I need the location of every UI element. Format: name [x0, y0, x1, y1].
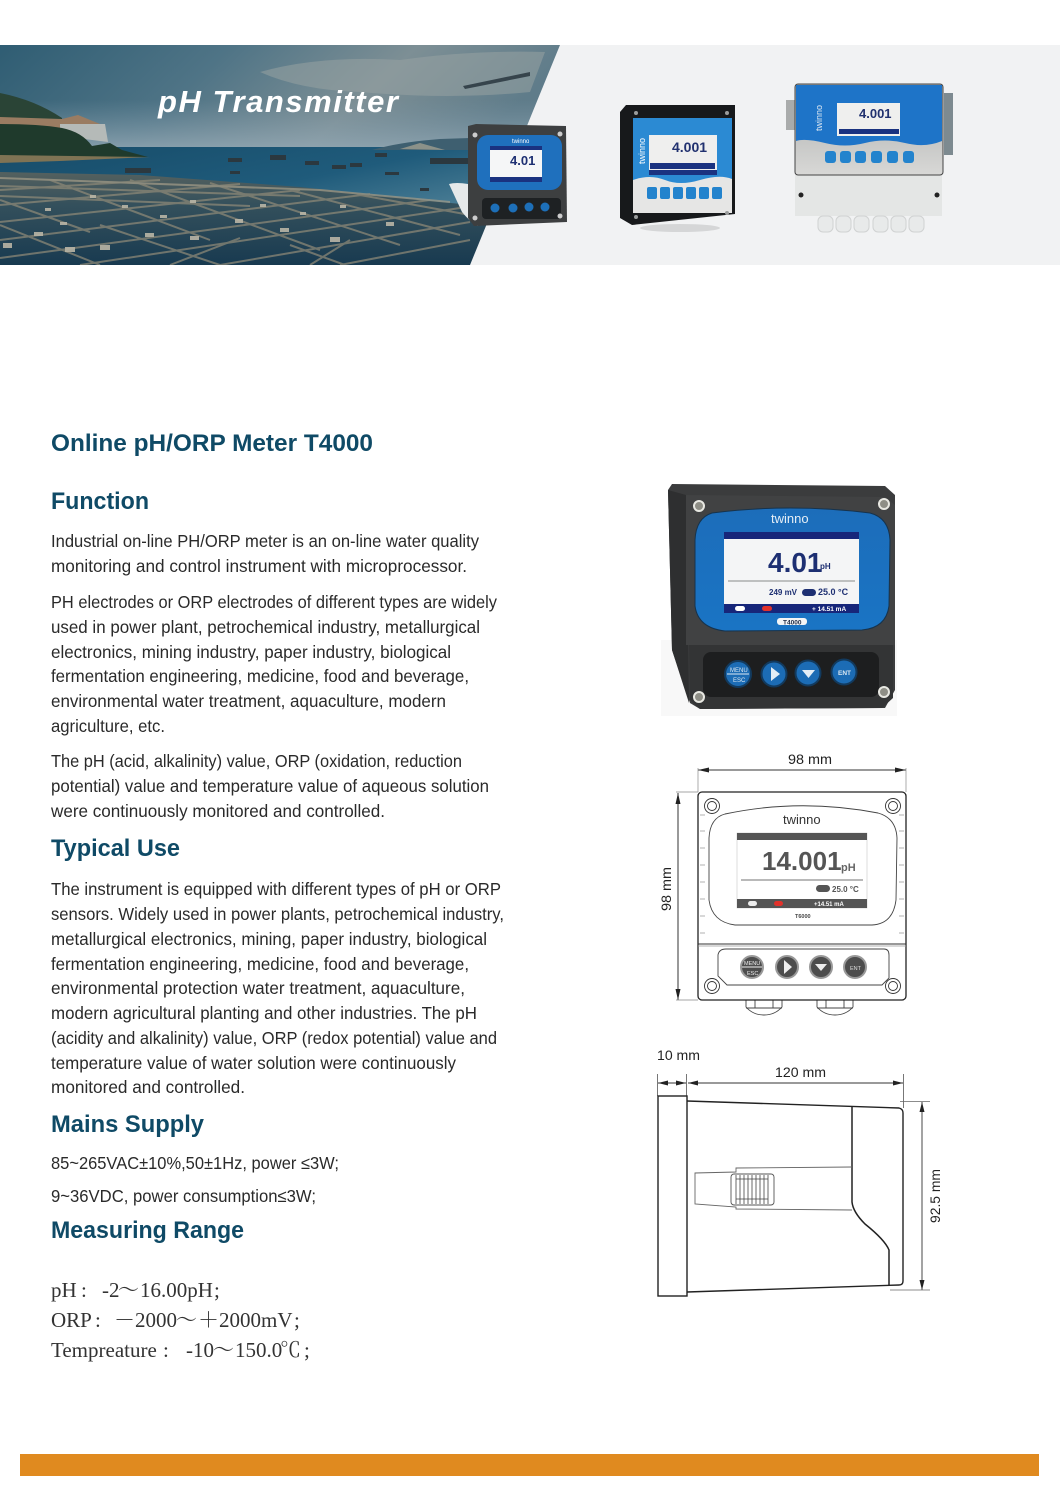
text block: typical use: The instrument is equipped with different types of pH or ORP [51, 879, 501, 899]
front dimension drawing: MENU [744, 961, 760, 967]
front dimension drawing: ESC [747, 971, 758, 977]
text block: measuring range values: Tempreature [51, 1338, 157, 1362]
text block: function paragraph 2 [51, 592, 497, 736]
banner device: T4000 panel meter: twinno [512, 139, 530, 145]
text block: function paragraph 3: were continuously monitored and controlled. [50, 801, 385, 821]
text block: measuring range values: 2000 [135, 1308, 177, 1332]
product photo: T4000 meter: MENU [730, 668, 748, 674]
banner device: square meter [620, 105, 735, 232]
text block: measuring range values: ～ [176, 1308, 197, 1332]
banner photo: coastal aquaculture rafts [0, 45, 560, 265]
text block: function paragraph 3 [50, 751, 489, 821]
screen: 4.01 [768, 547, 822, 578]
text block: typical use: modern agricultural planting and other industries. The pH [51, 1003, 477, 1023]
drawing screen: +14.51 mA [814, 902, 845, 908]
banner device: wall-mounted meter: twinno [814, 105, 824, 131]
text block: measuring range values: : [81, 1278, 87, 1302]
text block: measuring range values: ; [304, 1338, 310, 1362]
text block: function paragraph 1: Industrial on-line PH/ORP meter is an on-line water quality [51, 531, 479, 551]
text block: measuring range values: -10 [186, 1338, 214, 1362]
text block: mains supply [51, 1153, 339, 1206]
cable glands [746, 1000, 853, 1015]
text block: typical use: monitored and controlled. [51, 1077, 245, 1097]
text block: measuring range values: : [163, 1338, 169, 1362]
text block: measuring range values: ～ [118, 1278, 139, 1302]
text block: measuring range values [51, 1278, 310, 1362]
heading: Typical Use: Typical Use [51, 835, 180, 862]
product photo: T4000 meter: T4000 [783, 620, 802, 626]
text block: typical use: (acidity and alkalinity) value, ORP (redox potential) value and [51, 1028, 497, 1048]
heading: Mains Supply: Mains Supply [51, 1111, 205, 1138]
text block: mains supply: 9~36VDC, power consumption≤3W; [51, 1186, 316, 1206]
screen [724, 532, 859, 613]
front dimension drawing [658, 751, 906, 1015]
dimension: 10 mm [657, 1047, 700, 1096]
drawing screen [737, 833, 867, 908]
text block: measuring range values: 150.0 [235, 1338, 282, 1362]
dimension: 98 mm width: 98 mm [788, 751, 832, 767]
front dimension drawing: ENT [850, 966, 862, 972]
text block: typical use: sensors. Widely used in power plants, petrochemical industry, [51, 904, 504, 924]
text block: mains supply: 85~265VAC±10%,50±1Hz, power ≤3W; [51, 1153, 339, 1173]
text block: typical use: environmental protection water treatment, aquaculture, [51, 978, 465, 998]
housing outline [658, 1096, 903, 1296]
product photo: T4000 meter: ESC [733, 678, 746, 684]
dimension: 98 mm height [658, 792, 698, 1000]
dimension: 120 mm: 120 mm [775, 1064, 826, 1080]
dimension: 92.5 mm: 92.5 mm [927, 1169, 943, 1223]
front dimension drawing: T6000 [795, 914, 811, 920]
dimension: 92.5 mm [890, 1102, 943, 1290]
banner device: wall-mounted meter: 4.001 [859, 106, 892, 121]
drawing screen: 14.001 [762, 846, 842, 876]
banner device: T4000 panel meter [449, 124, 567, 226]
banner device: square meter: twinno [637, 138, 647, 164]
text block: function paragraph 2: fermentation engineering, medicine, food and beverage, [51, 666, 469, 686]
text block: function paragraph 2: agriculture, etc. [51, 716, 165, 736]
text block: measuring range values: － [114, 1308, 135, 1332]
banner title: pH Transmitter [157, 84, 400, 119]
dimension: 120 mm [688, 1064, 904, 1108]
heading: Measuring Range: Measuring Range [51, 1217, 244, 1244]
text block: typical use: fermentation engineering, medicine, food and beverage, [51, 954, 469, 974]
drawing screen: 25.0 °C [832, 885, 859, 894]
text block: measuring range values: ; [294, 1308, 300, 1332]
text block: function paragraph 2: environmental water treatment, aquaculture, modern [51, 691, 446, 711]
text block: measuring range values: ℃ [280, 1338, 301, 1362]
text block: function paragraph 3: The pH (acid, alkalinity) value, ORP (oxidation, reduction [51, 751, 462, 771]
text block: measuring range values: 2000mV [219, 1308, 292, 1332]
text block: typical use [51, 879, 504, 1097]
product title: Online pH/ORP Meter T4000 [51, 430, 373, 457]
text block: typical use: temperature value of water solution were continuously [51, 1053, 456, 1073]
footer bar [20, 1454, 1039, 1476]
banner device: T4000 panel meter: 4.01 [510, 153, 535, 168]
banner background [0, 45, 1060, 265]
text block: measuring range values: 16.00pH [140, 1278, 213, 1302]
keypad buttons [725, 660, 856, 687]
dimension: 98 mm height: 98 mm [658, 867, 674, 911]
text block: function paragraph 1: monitoring and control instrument with microprocessor. [51, 556, 467, 576]
banner device: square meter: 4.001 [672, 139, 707, 155]
text block: measuring range values: ～ [213, 1338, 234, 1362]
side dimension drawing [657, 1047, 943, 1296]
text block: measuring range values: ORP [51, 1308, 92, 1332]
text block: function paragraph 1 [51, 531, 479, 576]
text block: measuring range values: -2 [102, 1278, 120, 1302]
text block: function paragraph 2: electronics, mining industry, paper industry, biological [51, 642, 451, 662]
text block: function paragraph 2: used in power plant, petrochemical industry, metallurgical [51, 617, 480, 637]
text block: typical use: metallurgical electronics, mining, paper industry, biological [51, 929, 487, 949]
heading: Function: Function [51, 488, 149, 515]
dimension: 98 mm width [698, 751, 906, 792]
drawing screen: pH [841, 862, 856, 874]
text block: measuring range values: ; [214, 1278, 220, 1302]
text block: function paragraph 3: potential) value and temperature value of aqueous solution [51, 776, 489, 796]
product photo: T4000 meter [661, 484, 897, 716]
banner device: wall-mounted meter [786, 84, 953, 232]
screen: 25.0 °C [818, 587, 849, 597]
text block: measuring range values: ＋ [198, 1308, 219, 1332]
dimension: 10 mm: 10 mm [657, 1047, 700, 1063]
text block: measuring range values: : [95, 1308, 101, 1332]
product photo: T4000 meter: ENT [838, 670, 851, 677]
drawing keypad buttons [741, 956, 866, 978]
screen: + 14.51 mA [812, 606, 846, 613]
text block: measuring range values: pH [51, 1278, 77, 1302]
front dimension drawing: twinno [783, 812, 821, 827]
screen: 249 mV [769, 588, 798, 597]
text block: function paragraph 2: PH electrodes or ORP electrodes of different types are widely [51, 592, 497, 612]
screen: pH [820, 562, 831, 571]
product photo: T4000 meter: twinno [771, 511, 809, 526]
